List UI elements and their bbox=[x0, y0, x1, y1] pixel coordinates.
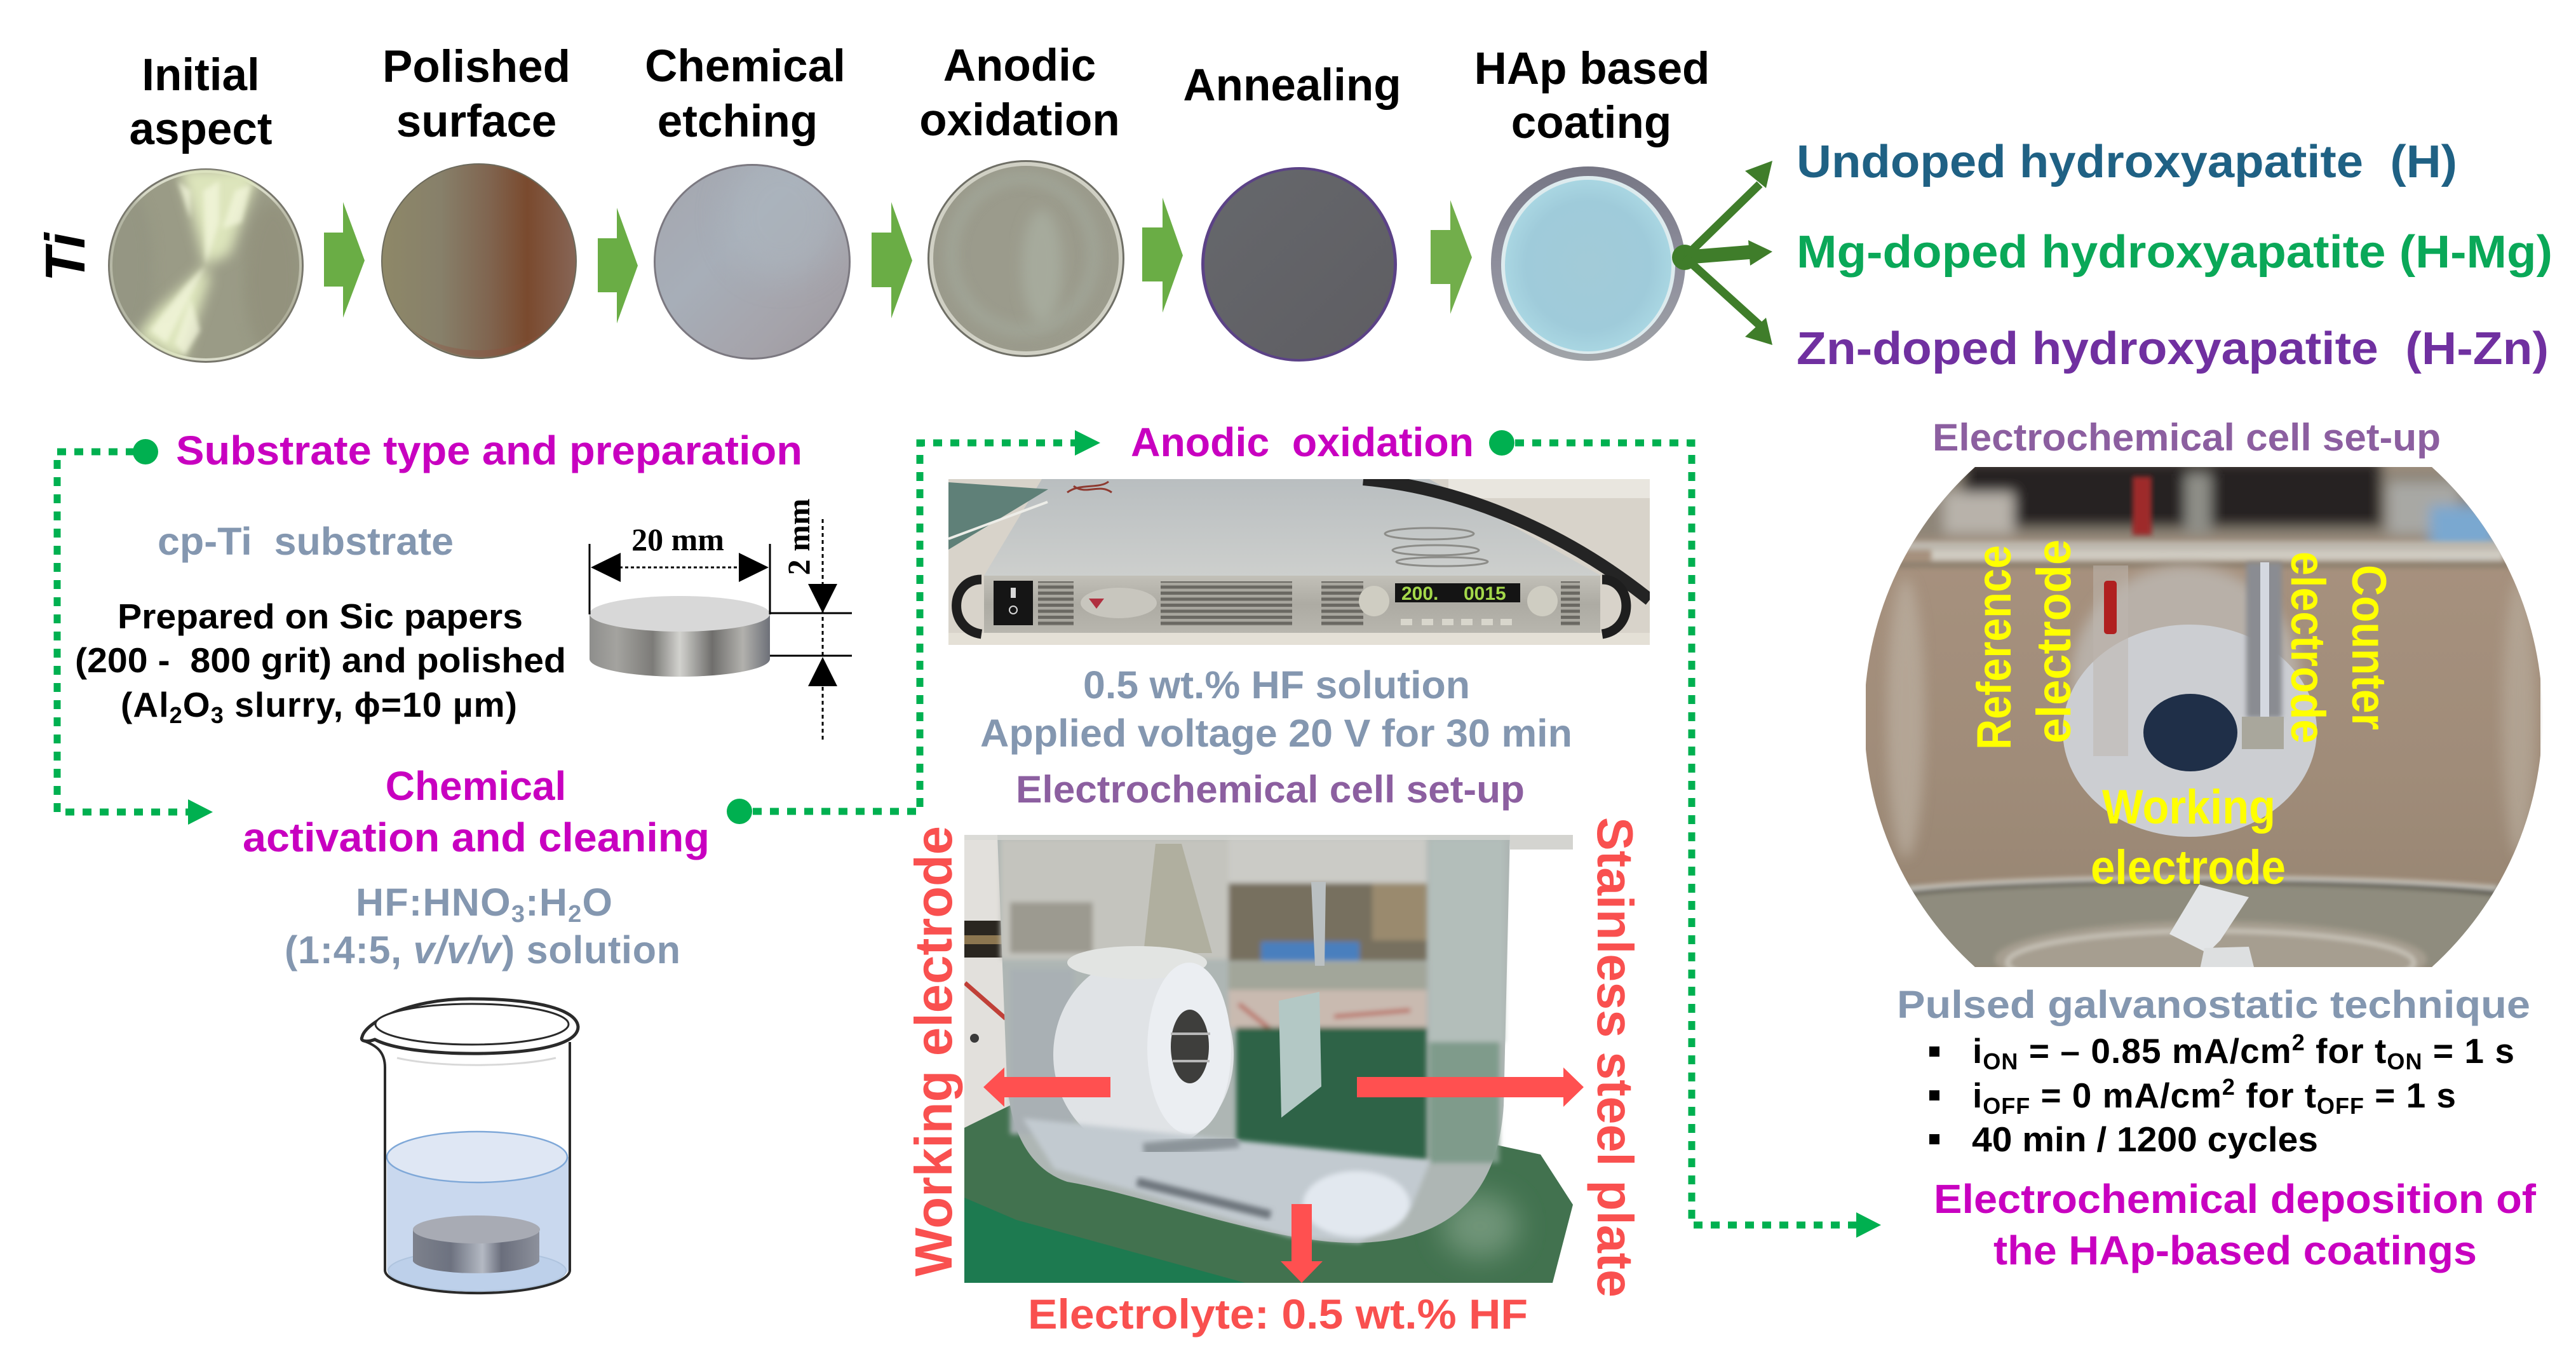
text: preparation details: 3 bbox=[211, 702, 224, 728]
heading: electrochemical cell set-up (deposition): Electrochemical cell set-up bbox=[1932, 416, 2441, 459]
list: pulse parameters: OFF bbox=[2317, 1093, 2364, 1119]
heading: Initial aspect bbox=[130, 50, 272, 154]
photo: three-electrode deposition cell bbox=[1866, 461, 2540, 998]
photo: anodic oxidation cell bbox=[964, 835, 1574, 1283]
list: pulse parameters: = 0 mA/cm bbox=[2030, 1076, 2222, 1115]
list: pulse parameters: ON bbox=[1983, 1048, 2018, 1074]
text: preparation details bbox=[75, 597, 566, 728]
labels: electrodes in the photo: Working bbox=[2102, 780, 2276, 834]
list: pulse parameters: = – 0.85 mA/cm bbox=[2018, 1031, 2291, 1071]
label: undoped hydroxyapatite: Undoped hydroxyapatite (H) bbox=[1797, 137, 2457, 187]
heading: chemical activation and cleaning: Chemical bbox=[386, 763, 566, 809]
text: etching solution: :H bbox=[525, 881, 567, 924]
text: preparation details: (200 - 800 grit) and polished bbox=[75, 640, 566, 680]
text: etching solution bbox=[285, 881, 680, 971]
text: anodic oxidation conditions: 0.5 wt.% HF solution bbox=[1083, 663, 1470, 707]
heading: chemical activation and cleaning: activation and cleaning bbox=[243, 815, 710, 860]
labels: electrodes in the photo: electrode bbox=[2281, 552, 2335, 743]
list: pulse parameters: i bbox=[1972, 1031, 1982, 1071]
text: pulsed galvanostatic technique: Pulsed galvanostatic technique bbox=[1897, 983, 2530, 1026]
red arrow: to stainless steel plate bbox=[1357, 1067, 1584, 1107]
arrow: step 5 bbox=[1431, 200, 1472, 314]
label: working electrode: Working electrode bbox=[904, 826, 963, 1276]
text: preparation details: 2 bbox=[170, 702, 182, 728]
heading: Anodic oxidation: Anodic bbox=[943, 41, 1096, 91]
flow connector: anodic oxidation to deposition bbox=[1489, 430, 1881, 1238]
photo: etched disc bbox=[654, 152, 851, 360]
icon: beaker with submerged disc bbox=[361, 999, 578, 1293]
text: preparation details: slurry, ϕ=10 µm) bbox=[224, 685, 517, 724]
heading: Chemical etching: etching bbox=[657, 97, 818, 147]
list: pulse parameters: OFF bbox=[1983, 1093, 2030, 1119]
text: etching solution: 2 bbox=[568, 901, 581, 928]
text: anodic oxidation conditions: Applied voltage 20 V for 30 min bbox=[980, 712, 1572, 755]
text: etching solution: HF:HNO bbox=[356, 881, 511, 924]
heading: Initial aspect: aspect bbox=[130, 104, 272, 154]
text: etching solution: (1:4:5, v/v/v) solution bbox=[285, 928, 680, 971]
label: Mg-doped hydroxyapatite: Mg-doped hydroxyapatite (H-Mg) bbox=[1797, 227, 2552, 278]
heading: electrochemical deposition bbox=[1934, 1176, 2537, 1273]
flow connector: substrate to chemical activation bbox=[57, 439, 213, 825]
list: pulse parameters: i bbox=[1972, 1076, 1982, 1115]
labels: electrodes in the photo: electrode bbox=[2091, 841, 2286, 895]
photo: DC power supply: 0015 bbox=[1464, 583, 1506, 604]
heading: Chemical etching: Chemical bbox=[645, 41, 846, 91]
heading: Polished surface: Polished bbox=[382, 42, 570, 92]
list: pulse parameters: for t bbox=[2305, 1031, 2386, 1071]
photo: DC power supply: 200. bbox=[1401, 583, 1438, 604]
photo: annealed disc bbox=[1201, 167, 1397, 362]
label: stainless steel plate: Stainless steel plate bbox=[1587, 817, 1643, 1297]
list: pulse parameters: = 1 s bbox=[2423, 1031, 2514, 1071]
list: pulse parameters: for t bbox=[2235, 1076, 2316, 1115]
list: pulse parameters: 2 bbox=[2222, 1074, 2235, 1100]
heading: substrate type and preparation: Substrate type and preparation bbox=[176, 428, 802, 473]
text: preparation details: (Al bbox=[121, 685, 169, 724]
text: anodic oxidation conditions bbox=[980, 663, 1572, 755]
label: electrolyte: Electrolyte: 0.5 wt.% HF bbox=[1028, 1290, 1528, 1337]
label: Zn-doped hydroxyapatite: Zn-doped hydroxyapatite (H-Zn) bbox=[1797, 323, 2549, 374]
photo: polished disc bbox=[381, 163, 577, 359]
labels: electrodes in the photo: Counter bbox=[2342, 565, 2396, 730]
text: preparation details: Prepared on Sic papers bbox=[118, 597, 523, 636]
heading: HAp based coating: HAp based bbox=[1474, 44, 1709, 94]
heading: Initial aspect: Initial bbox=[142, 50, 260, 100]
list: pulse parameters: 40 min / 1200 cycles bbox=[1972, 1120, 2318, 1159]
photo: anodized disc bbox=[927, 160, 1124, 357]
text: etching solution: 3 bbox=[511, 901, 525, 928]
icon: Ti disc with dimensions: 20 mm bbox=[631, 522, 724, 557]
red arrow: to working electrode bbox=[983, 1067, 1110, 1107]
arrow: step 1 bbox=[324, 202, 365, 318]
heading: Anodic oxidation bbox=[919, 41, 1120, 146]
labels: electrodes in the photo: electrode bbox=[2027, 539, 2081, 743]
heading: electrochemical deposition: the HAp-based coatings bbox=[1993, 1228, 2477, 1273]
heading: Polished surface: surface bbox=[396, 97, 556, 147]
heading: electrochemical deposition: Electrochemical deposition of bbox=[1934, 1176, 2537, 1222]
list: pulse parameters: 2 bbox=[2292, 1029, 2305, 1055]
arrow: step 4 bbox=[1142, 198, 1183, 313]
flow connector: chemical activation to anodic oxidation bbox=[727, 430, 1100, 824]
text: etching solution: O bbox=[583, 881, 612, 924]
arrow: step 2 bbox=[598, 208, 638, 323]
label: Ti: Ti bbox=[34, 232, 97, 281]
labels: electrodes in the photo bbox=[1967, 539, 2396, 895]
heading: Anodic oxidation: oxidation bbox=[919, 95, 1120, 146]
text: preparation details: O bbox=[183, 685, 210, 724]
photo: DC power supply bbox=[948, 479, 1650, 645]
list: pulse parameters: = 1 s bbox=[2364, 1076, 2456, 1115]
arrows: three branches to coating types bbox=[1672, 161, 1772, 345]
heading: Annealing: Annealing bbox=[1183, 60, 1401, 111]
text: cp-Ti substrate: cp-Ti substrate bbox=[158, 520, 454, 563]
arrow: step 3 bbox=[872, 202, 912, 318]
heading: Polished surface bbox=[382, 42, 570, 147]
icon: Ti disc with dimensions: 2 mm bbox=[781, 499, 816, 575]
labels: electrodes in the photo: Reference bbox=[1967, 545, 2021, 750]
icon: Ti disc with dimensions bbox=[590, 499, 852, 741]
list: pulse parameters: ON bbox=[2387, 1048, 2422, 1074]
heading: HAp based coating bbox=[1474, 44, 1709, 148]
red arrow: to electrolyte bbox=[1281, 1204, 1323, 1283]
heading: Chemical etching bbox=[645, 41, 846, 147]
heading: HAp based coating: coating bbox=[1511, 98, 1671, 148]
list: pulse parameters bbox=[1929, 1029, 2514, 1159]
heading: anodic oxidation: Anodic oxidation bbox=[1131, 419, 1474, 465]
heading: electrochemical cell set-up (anodic): Electrochemical cell set-up bbox=[1016, 768, 1525, 811]
heading: chemical activation and cleaning bbox=[243, 763, 710, 860]
photo: initial Ti disc bbox=[102, 168, 304, 363]
photo: HAp coated disc bbox=[1491, 166, 1685, 361]
